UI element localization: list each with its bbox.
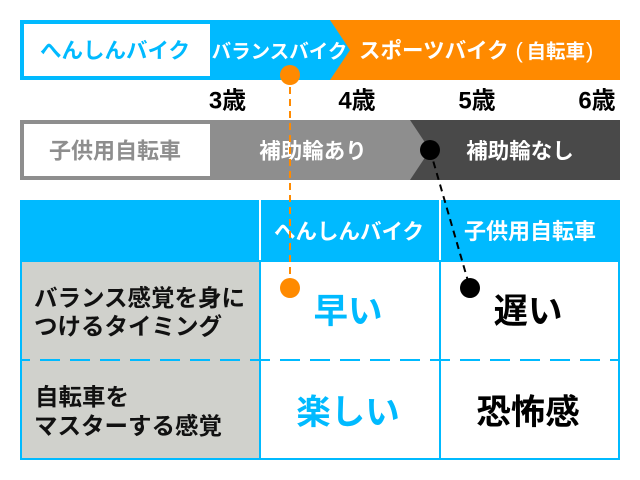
text: sports bike: 自転車: [526, 41, 585, 63]
black dot bottom: [460, 278, 480, 298]
label box: children's bicycle: [24, 124, 210, 176]
orange dot top: [280, 65, 300, 85]
top timeline bar: bike types: [20, 20, 620, 80]
header: children's bicycle: 子供用自転車: [464, 219, 596, 244]
black dot top: [420, 140, 440, 160]
age 3: 3歳: [209, 88, 246, 114]
text: sports bike: スポーツバイク: [359, 39, 509, 63]
age 5: 5歳: [458, 88, 496, 114]
cell: slow: 遅い: [494, 293, 562, 331]
panel: dark no training wheels segment: [400, 120, 620, 180]
row label: mastering line 2: マスターする感覚: [34, 413, 222, 439]
text: with training wheels: 補助輪あり: [259, 140, 367, 164]
row label column background: [22, 262, 260, 458]
orange marker connector: [280, 65, 300, 298]
orange dot bottom: [280, 278, 300, 298]
table header: [20, 200, 620, 262]
text: sports bike: ): [586, 38, 593, 63]
age 6: 6歳: [578, 88, 616, 114]
cell: fear: 恐怖感: [476, 394, 580, 432]
age 4: 4歳: [338, 88, 376, 114]
label box: henshin bike: [24, 24, 210, 76]
age labels: [209, 88, 616, 114]
second timeline bar: children's bicycle: [20, 120, 620, 180]
black marker connector: [420, 140, 480, 298]
panel: blue balance bike arrow: [20, 20, 350, 80]
table outer border: [21, 201, 619, 459]
panel: orange sports bike segment: [300, 20, 620, 80]
cell: fast: 早い: [314, 293, 382, 331]
cell: fun: 楽しい: [296, 394, 400, 432]
text: without training wheels: 補助輪なし: [466, 140, 574, 164]
text: sports bike: (: [516, 38, 524, 63]
panel: grey training wheels arrow: [20, 120, 430, 180]
comparison table: [20, 200, 620, 459]
text: balance bike: バランスバイク: [212, 41, 347, 63]
label box: henshin bike: へんしんバイク: [40, 39, 190, 63]
row label: mastering: 自転車を: [35, 384, 129, 410]
header: henshin bike: へんしんバイク: [274, 220, 424, 244]
row label: balance timing: バランス感覚を身に: [34, 285, 245, 311]
row label: balance timing line 2: つけるタイミング: [34, 312, 222, 340]
label box: children's bicycle: 子供用自転車: [49, 138, 181, 164]
